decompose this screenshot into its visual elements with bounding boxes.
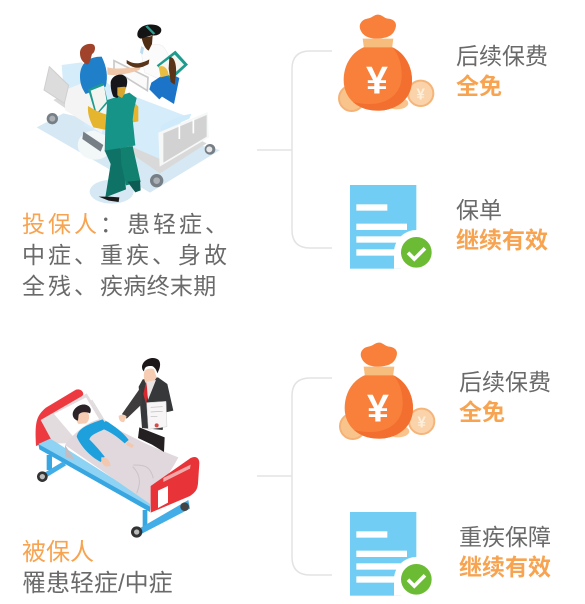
text: insured person condition: 被保人 bbox=[22, 539, 94, 566]
text: policyholder conditions: 疾病终末期 bbox=[100, 273, 216, 299]
text: second benefit, premium waived: 全免 bbox=[459, 399, 505, 425]
text: first benefit, premium waived: 全免 bbox=[456, 73, 502, 99]
text: policyholder conditions: 投保人 bbox=[22, 211, 100, 237]
text: policyholder conditions: 患轻症 bbox=[127, 211, 205, 237]
text: policy remains valid: 继续有效 bbox=[456, 227, 548, 253]
text: first benefit, premium waived bbox=[456, 43, 548, 99]
icon: policy document 2 bbox=[350, 512, 439, 602]
text: critical illness cover remains valid: 重疾保障 bbox=[459, 524, 551, 550]
text: policyholder conditions: 、 bbox=[205, 211, 231, 237]
text: policyholder conditions: 全残、 bbox=[22, 273, 100, 299]
illustration: medical staff around a hospital bed bbox=[37, 25, 220, 204]
text: policyholder conditions: 中症、重疾、身故 bbox=[22, 242, 230, 268]
text: policy remains valid bbox=[456, 197, 548, 253]
icon: money bag 2 bbox=[340, 343, 434, 439]
text: policyholder conditions: ： bbox=[100, 211, 126, 237]
text: second benefit, premium waived bbox=[459, 369, 551, 425]
text: policy remains valid: 保单 bbox=[456, 197, 502, 223]
connector: first group bracket bbox=[257, 51, 332, 248]
text: second benefit, premium waived: 后续保费 bbox=[459, 369, 551, 395]
connector: second group bracket bbox=[257, 378, 332, 575]
illustration: patient in bed with adviser bbox=[36, 358, 199, 538]
text: insured person condition: 罹患轻症/中症 bbox=[22, 570, 173, 597]
text: critical illness cover remains valid bbox=[459, 524, 551, 580]
text: insured person condition bbox=[22, 539, 173, 597]
text: critical illness cover remains valid: 继续有效 bbox=[459, 554, 551, 580]
icon: policy document 1 bbox=[350, 185, 439, 275]
icon: money bag 1 bbox=[339, 15, 433, 111]
text: policyholder conditions bbox=[22, 211, 231, 299]
text: first benefit, premium waived: 后续保费 bbox=[456, 43, 548, 69]
